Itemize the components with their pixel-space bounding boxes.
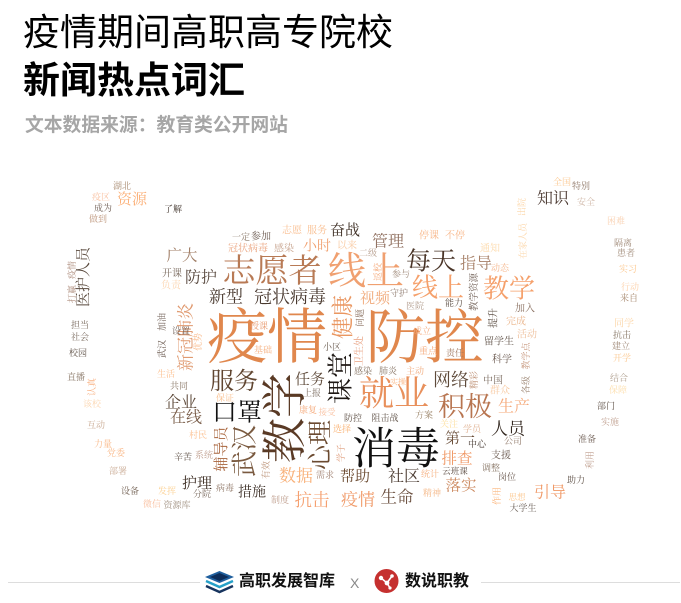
large words: 线上 xyxy=(412,274,464,302)
small words: centre: 参加 xyxy=(251,230,271,242)
small words: centre: 以来 xyxy=(337,238,357,252)
small words: centre: 感染 xyxy=(354,365,372,376)
footer: right line xyxy=(481,582,680,583)
small words: left arc: 辛苦 xyxy=(174,451,192,462)
small words: centre: 能力 xyxy=(445,297,463,308)
small words: right arc: 实习 xyxy=(619,263,637,274)
small words: centre: 医院 xyxy=(406,301,424,311)
small words: right arc: 教学点 xyxy=(520,342,531,370)
small words: left arc: 党委 xyxy=(107,447,125,458)
small words: right arc: 加入 xyxy=(515,302,535,314)
medium words: 引导 xyxy=(534,484,566,502)
small words: left arc: 湖北 xyxy=(113,180,131,191)
title line 2: 新闻热点词汇 xyxy=(23,60,245,101)
small words: left arc: 设置 xyxy=(172,326,190,336)
medium words: 排查 xyxy=(441,450,473,468)
icon: stacked layers logo xyxy=(205,571,234,594)
small words: centre: 重点 xyxy=(419,345,438,356)
medium words: 医护人员 xyxy=(75,246,92,307)
small words: centre: 统计 xyxy=(421,468,439,479)
small words: right arc: 群众 xyxy=(490,384,510,396)
small words: right arc: 部门 xyxy=(597,400,615,411)
medium words: 帮助 xyxy=(340,468,370,485)
footer separator X: X xyxy=(350,575,359,591)
small words: right arc: 岗位 xyxy=(498,471,516,482)
large words: 每天 xyxy=(406,248,456,276)
keyword: 就业: 就业 xyxy=(359,374,429,414)
keyword: 教学 (rotated): 教学 xyxy=(260,373,310,463)
small words: right arc: 保障 xyxy=(609,384,627,395)
small words: centre: 康复 xyxy=(299,404,317,415)
medium words: 措施 xyxy=(238,484,266,500)
small words: right arc: 安全 xyxy=(577,196,595,207)
small words: right arc xyxy=(419,176,639,513)
small words: left arc: 打赢 xyxy=(66,285,77,303)
title line 1: 疫情期间高职高专院校 xyxy=(23,12,393,53)
keyword: 防控: 防控 xyxy=(366,305,484,371)
small words: centre: 参与 xyxy=(392,268,410,279)
small words: left arc: 社会 xyxy=(71,331,89,342)
small words: right arc: 不停 xyxy=(445,228,465,242)
small words: centre: 阻击战 xyxy=(371,412,399,423)
small words: right arc: 留学生 xyxy=(484,334,514,348)
subtitle: data source: 文本数据来源：教育类公开网站 xyxy=(25,110,288,137)
small words: right arc: 抗击 xyxy=(613,329,631,340)
medium words: 冠状病毒 xyxy=(254,287,326,307)
icon: red circle logo xyxy=(374,569,398,593)
small words: left arc: 部署 xyxy=(109,465,127,476)
small words: right arc: 科学 xyxy=(492,352,512,366)
small words: centre: 需求 xyxy=(316,469,334,480)
small words: left arc: 系统 xyxy=(195,449,213,460)
medium words: 防护 xyxy=(185,268,217,286)
small words: right arc: 出院 xyxy=(516,198,527,216)
medium words xyxy=(75,190,570,510)
small words: right arc: 停课 xyxy=(419,228,439,242)
small words: left arc xyxy=(66,180,234,510)
small words: right arc: 通知 xyxy=(480,242,500,254)
small words: centre: 精彩 xyxy=(468,371,479,389)
small words: left arc: 该校 xyxy=(83,398,102,409)
small words: right arc: 实施 xyxy=(601,416,619,427)
small words: right arc: 教学资源 xyxy=(468,273,480,311)
small words: right arc: 同学 xyxy=(614,316,634,330)
small words: left arc: 做到 xyxy=(89,213,107,224)
small words: centre: 实操 xyxy=(390,376,406,386)
small words: left arc: 互动 xyxy=(87,419,105,430)
small words: right arc: 思想 xyxy=(508,492,526,502)
medium words: 数据 xyxy=(279,466,313,486)
small words: centre: 守护 xyxy=(390,287,408,298)
small words: centre: 服务 xyxy=(307,224,327,236)
medium words: 护理 xyxy=(182,475,212,492)
keyword: 线上: 线上 xyxy=(328,251,404,293)
small words: centre: 成立 xyxy=(413,325,431,336)
small words: left arc: 优势 xyxy=(192,333,203,351)
small words: centre: 中心 xyxy=(468,438,487,449)
small words: left arc: 分院 xyxy=(193,488,211,499)
small words: right arc: 公司 xyxy=(504,436,522,446)
small words: right arc: 来自 xyxy=(620,292,638,303)
medium words: 抗击 xyxy=(294,490,330,510)
small words: right arc: 动态 xyxy=(491,262,510,273)
medium words: 网络 xyxy=(433,370,469,390)
medium words: 奋战 xyxy=(330,222,360,239)
small words: centre: 上报 xyxy=(303,387,321,398)
medium words: 落实 xyxy=(445,476,477,494)
small words: right arc: 隔离 xyxy=(614,237,632,248)
large words: 服务 xyxy=(210,368,258,395)
small words: right arc: 患者 xyxy=(617,247,635,258)
small words: left arc: 疫区 xyxy=(92,191,110,202)
large words: 口罩 xyxy=(212,398,262,426)
small words: left arc: 疫情 xyxy=(66,261,77,279)
small words: right arc: 提升 xyxy=(486,308,500,328)
medium words: 生产 xyxy=(498,398,530,416)
small words: centre: 授课 xyxy=(250,320,268,331)
medium words: 任务 xyxy=(295,371,325,388)
small words: left arc: 生活 xyxy=(157,368,175,379)
footer brand: 高职发展智库: 高职发展智库 xyxy=(239,573,335,590)
small words: left arc: 村民 xyxy=(189,429,207,440)
small words: left arc: 认真 xyxy=(86,377,97,396)
medium words: 广大 xyxy=(166,246,198,264)
small words: centre: 卫生处 xyxy=(352,336,366,366)
medium words: 新冠肺炎 xyxy=(176,302,196,371)
small words: left arc: 力量 xyxy=(94,438,112,449)
small words: left arc: 微信 xyxy=(143,498,161,509)
small words: left arc: 开课 xyxy=(162,268,182,280)
medium words: 人员 xyxy=(491,420,527,438)
small words: right arc: 结合 xyxy=(610,372,628,383)
small words: left arc: 负责 xyxy=(161,278,182,292)
footer brand: 数说职教: 数说职教 xyxy=(405,573,469,590)
medium words: 知识 xyxy=(537,190,570,208)
small words: right arc: 全国 xyxy=(553,176,571,187)
small words: centre: 一定 xyxy=(232,231,250,242)
medium words: 管理 xyxy=(372,232,404,250)
small words: right arc: 特别 xyxy=(572,180,590,191)
medium words: 企业 xyxy=(165,394,197,412)
small words: right arc: 中国 xyxy=(483,374,503,386)
medium words: 社区 xyxy=(388,468,420,486)
small words: right arc: 开学 xyxy=(613,352,631,363)
small words: centre: 问题 xyxy=(354,309,365,327)
keyword: 志愿者: 志愿者 xyxy=(222,253,322,290)
large words: 健康 xyxy=(330,295,356,339)
small words: left arc: 发挥 xyxy=(158,485,176,496)
keyword: 消毒: 消毒 xyxy=(352,424,440,474)
small words: centre: 基础 xyxy=(254,344,272,355)
medium words: 指导 xyxy=(460,254,492,272)
medium words: 新型 xyxy=(209,288,243,306)
small words: right arc: 助力 xyxy=(567,474,585,485)
small words: centre: 接受 xyxy=(318,407,336,417)
small words: left arc: 武汉 xyxy=(156,340,167,358)
small words: right arc: 建立 xyxy=(612,340,630,351)
small words: centre: 选择 xyxy=(333,423,351,434)
small words: centre: 方案 xyxy=(415,409,433,420)
small words: centre: 关注 xyxy=(440,418,458,429)
small words: right arc: 行动 xyxy=(621,281,639,292)
large words: 教学 xyxy=(483,274,535,304)
small words: centre: 主动 xyxy=(406,365,424,376)
small words: left arc: 病毒 xyxy=(216,482,234,493)
medium words: 生命 xyxy=(380,488,414,506)
small words: centre xyxy=(228,224,487,505)
medium words: 辅导员 xyxy=(213,426,230,472)
small words: right arc: 利用 xyxy=(584,451,595,469)
small words: right arc: 作用 xyxy=(491,487,502,505)
small words: left arc: 担当 xyxy=(71,319,89,330)
large words: 心理 xyxy=(306,420,334,470)
medium words: 疫情 xyxy=(341,490,375,510)
small words: left arc: 了解 xyxy=(164,203,182,214)
small words: right arc: 支援 xyxy=(491,448,511,462)
small words: left arc: 设备 xyxy=(121,485,139,496)
small words: centre: 制度 xyxy=(271,494,289,505)
small words: centre: 学员 xyxy=(463,423,482,434)
medium words: 视频 xyxy=(360,290,391,307)
small words: left arc: 成为 xyxy=(94,202,112,213)
small words: centre: 冠状病毒 xyxy=(228,242,268,254)
small words: centre: 肺炎 xyxy=(379,365,398,376)
small words: centre: 返校 xyxy=(372,262,383,281)
small words: right arc: 活动 xyxy=(517,328,537,340)
small words: left arc: 直播 xyxy=(67,371,85,382)
small words: right arc: 大学生 xyxy=(509,502,537,513)
small words: right arc: 完成 xyxy=(506,314,526,328)
large words: 课堂 xyxy=(326,352,356,404)
medium words: 资源 xyxy=(117,191,148,208)
small words: centre: 感染 xyxy=(274,242,294,254)
small words: left arc: 共同 xyxy=(170,380,188,391)
small words: centre: 志愿 xyxy=(282,224,302,236)
medium words: 在线 xyxy=(170,408,202,426)
small words: centre: 精神 xyxy=(423,487,441,498)
large words: 积极 xyxy=(438,392,492,422)
keyword: 疫情: 疫情 xyxy=(207,305,327,371)
small words: right arc: 准备 xyxy=(578,433,596,444)
small words: centre: 小区 xyxy=(323,341,341,352)
small words: right arc: 在家人员 xyxy=(517,222,528,259)
small words: centre: 二级 xyxy=(359,248,377,258)
large words: 武汉 xyxy=(230,425,260,477)
small words: centre: 学子 xyxy=(335,444,346,462)
medium words: 小时 xyxy=(303,238,331,254)
small words: right arc: 调整 xyxy=(482,462,500,473)
small words: centre: 责任 xyxy=(446,347,464,358)
small words: left arc: 保证 xyxy=(216,393,234,403)
small words: left arc: 资源库 xyxy=(163,499,191,510)
large words xyxy=(210,248,535,477)
medium words: 第一 xyxy=(445,430,475,447)
footer: left line xyxy=(8,582,200,583)
small words: right arc: 各级 xyxy=(520,376,531,394)
small words: centre: 云班课 xyxy=(442,466,468,476)
small words: right arc: 困难 xyxy=(607,215,625,226)
small words: centre: 有效 xyxy=(260,461,271,479)
small words: left arc: 加油 xyxy=(156,313,167,331)
small words: centre: 防控 xyxy=(344,412,362,423)
small words: left arc: 校园 xyxy=(69,347,87,358)
